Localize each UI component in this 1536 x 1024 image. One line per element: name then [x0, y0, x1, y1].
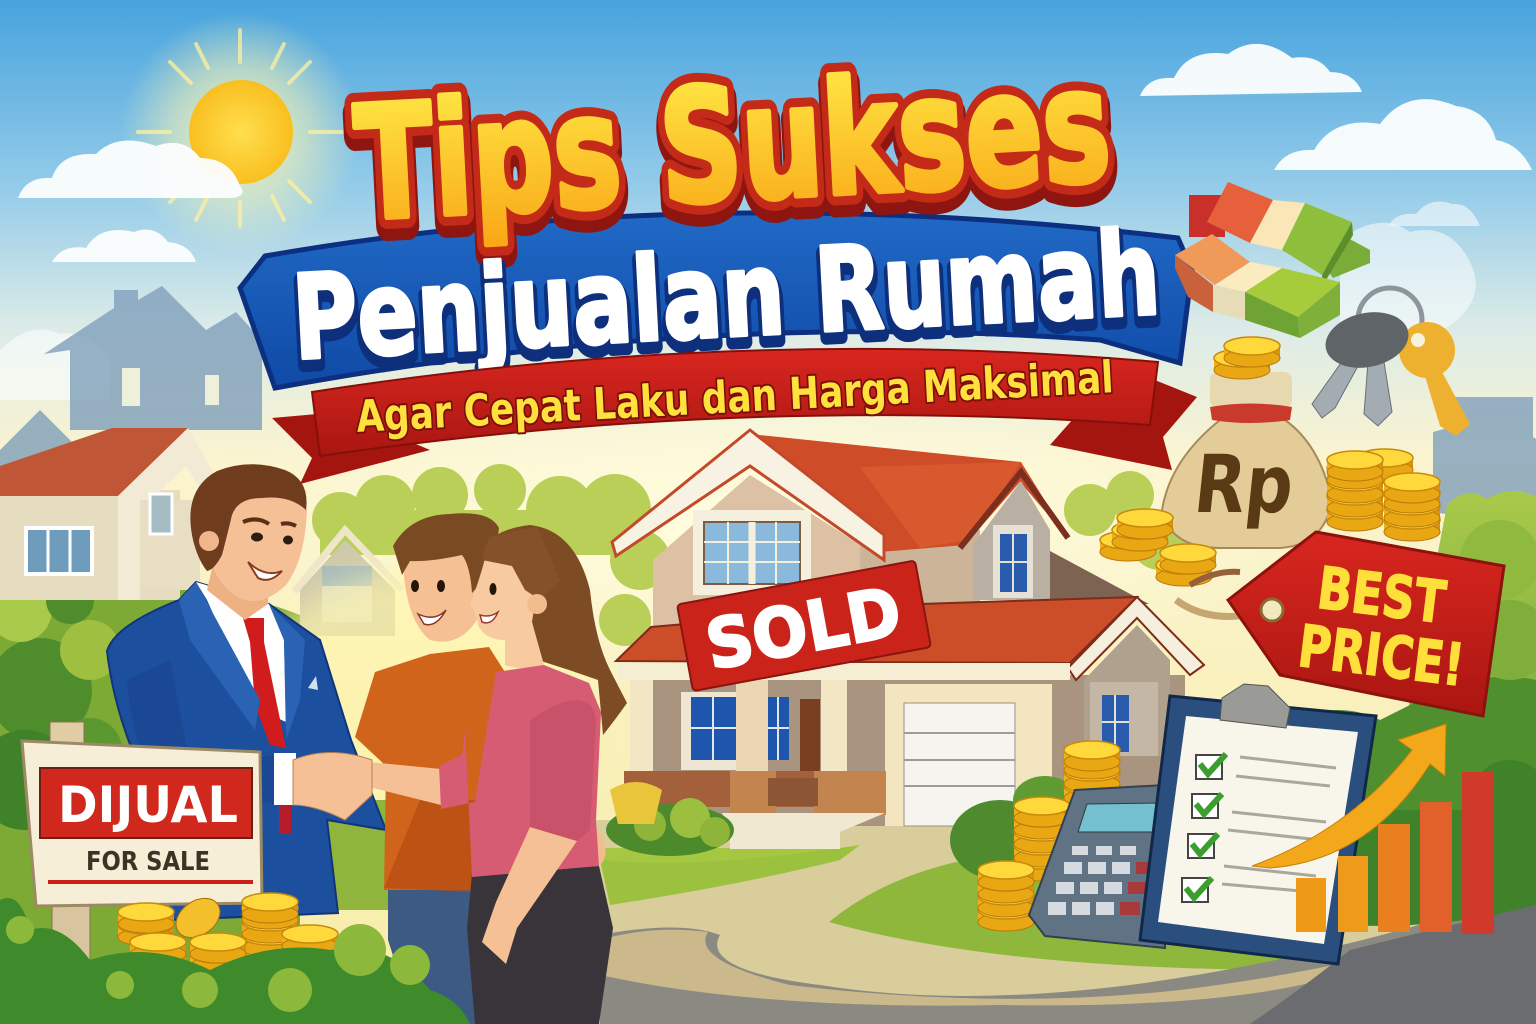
lawn behind handshake: [327, 800, 397, 910]
main house: [612, 430, 1204, 849]
background bushes: [0, 464, 1536, 1024]
blue banner: [240, 213, 1192, 388]
coin stacks by calculator: [978, 741, 1120, 931]
sign: SOLD: SOLD: [700, 573, 907, 686]
house: small middle neighbour: [294, 530, 402, 636]
heading: Penjualan Rumah: Penjualan Rumah: [290, 213, 1164, 394]
heading: Tips Sukses: Tips Sukses: [351, 34, 1114, 255]
icon: handshake: [293, 752, 372, 820]
person: agent: [107, 464, 386, 920]
heading: Penjualan Rumah: Penjualan Rumah: [289, 206, 1163, 387]
distant houses: [0, 286, 1536, 519]
road and lawn: [590, 810, 1536, 1024]
for-sale sign: [22, 722, 262, 990]
icon: flower basket: [610, 782, 662, 824]
bar chart with arrow: [1252, 724, 1494, 934]
icon: money bag Rp: [1162, 337, 1332, 548]
icon: calculator: [1029, 785, 1165, 948]
coin pile by sign: [118, 890, 338, 987]
icon: sun: [120, 12, 360, 252]
label: for sale: FOR SALE: [86, 847, 210, 877]
house: left neighbour: [0, 428, 222, 600]
people: [107, 464, 627, 1024]
background glow: [160, 360, 1360, 700]
price tag: best price: [1176, 532, 1504, 716]
bushes by porch: [606, 776, 1077, 880]
price tag: best price: PRICE!: [1295, 612, 1468, 700]
glow behind people: [250, 570, 590, 830]
label: Rp: Rp: [1190, 438, 1298, 531]
person: man in orange: [355, 513, 606, 1024]
person: woman in pink: [369, 525, 627, 1024]
cash stacks: [1175, 182, 1370, 338]
clouds: [0, 44, 1532, 400]
heading: Tips Sukses: Tips Sukses: [351, 43, 1115, 264]
label: dijual: DIJUAL: [58, 776, 238, 834]
foreground bushes: [0, 898, 470, 1024]
ribbon: subtitle: [272, 349, 1197, 484]
ribbon: subtitle: Agar Cepat Laku dan Harga Maksimal: [355, 352, 1115, 443]
coin stacks near bag: [1100, 449, 1440, 586]
icon: keys: [1312, 288, 1470, 436]
main title: [240, 34, 1197, 484]
price tag: best price: BEST: [1314, 554, 1450, 637]
clipboard checklist: [1140, 684, 1376, 964]
heading: Tips Sukses: Tips Sukses: [351, 34, 1114, 255]
